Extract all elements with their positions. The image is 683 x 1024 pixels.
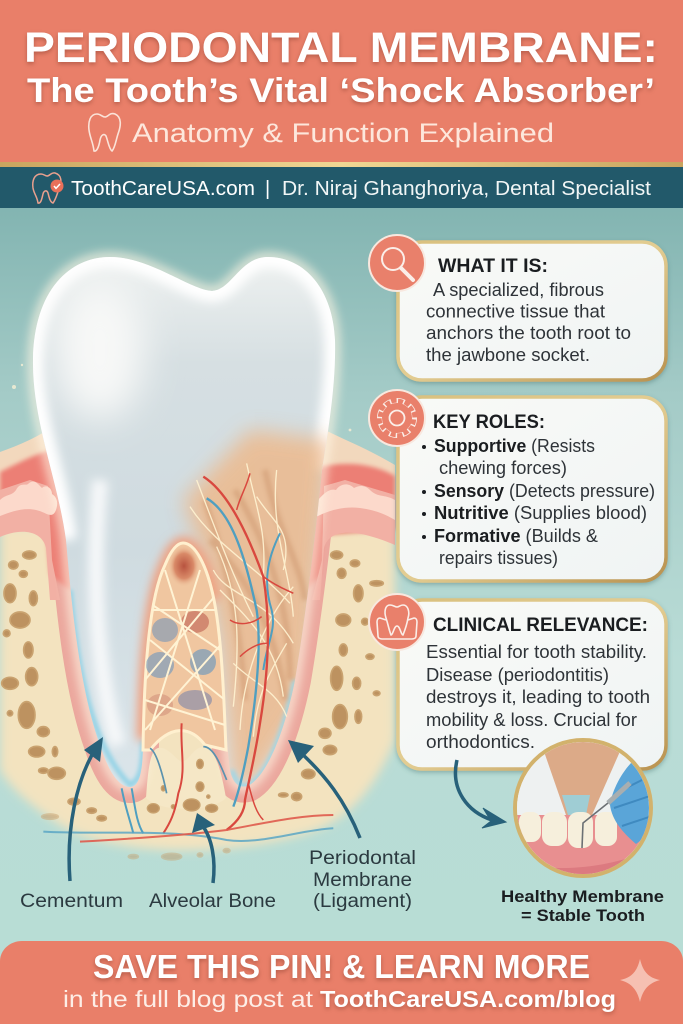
panel: key roles (369, 390, 666, 581)
panel: clinical relevance (369, 594, 666, 769)
description: orthodontics. (426, 732, 535, 752)
roles list (422, 436, 655, 568)
description: destroys it, leading to tooth (426, 687, 650, 707)
icon: magnifier (369, 235, 425, 291)
label: periodontal membrane (309, 848, 416, 912)
site name: ToothCareUSA.com (71, 178, 255, 200)
description: connective tissue that (426, 302, 605, 322)
arrow: cementum (69, 737, 103, 881)
photo: dental probe on healthy gums (515, 740, 655, 876)
bone mass (0, 525, 395, 850)
roles list: Supportive (Resists (434, 436, 595, 456)
description: the jawbone socket. (426, 345, 590, 365)
heading: KEY ROLES: (433, 412, 545, 433)
icon: tooth outline (89, 114, 120, 151)
roles list: Formative (Builds & (434, 526, 598, 546)
description: A specialized, fibrous (433, 280, 604, 300)
left gum pink body (0, 480, 60, 600)
right gum lobes (313, 484, 395, 520)
title line 2: The Tooth’s Vital ‘Shock Absorber’ (27, 72, 655, 110)
caption (501, 887, 664, 925)
arrow: to photo (455, 760, 506, 828)
label: cementum: Cementum (20, 891, 123, 912)
middle bone pores (147, 759, 218, 813)
label: periodontal membrane: (Ligament) (313, 891, 412, 912)
icon: logo tooth (33, 173, 64, 203)
footer link text: in the full blog post at (63, 986, 314, 1012)
footer heading: SAVE THIS PIN! & LEARN MORE (93, 948, 590, 985)
label: periodontal membrane: Membrane (313, 870, 412, 891)
roles list: repairs tissues) (439, 548, 558, 568)
title line 1: PERIODONTAL MEMBRANE: (24, 24, 658, 72)
background (0, 205, 683, 965)
caption: Healthy Membrane (501, 887, 664, 906)
description (426, 280, 631, 365)
gold divider (0, 162, 683, 167)
icon: gear (369, 390, 425, 446)
author name: Dr. Niraj Ghanghoriya, Dental Specialist (282, 178, 651, 200)
arrow: alveolar bone (192, 813, 215, 883)
heading: WHAT IT IS: (438, 256, 548, 277)
right gum cream edge (310, 430, 395, 500)
description: Essential for tooth stability. (426, 642, 647, 662)
heading: CLINICAL RELEVANCE: (433, 615, 648, 636)
periodontal band (66, 470, 322, 787)
middle bone between roots (146, 747, 226, 809)
description: anchors the tooth root to (426, 323, 631, 343)
subtitle: Anatomy & Function Explained (132, 118, 554, 148)
sparkles (12, 364, 351, 431)
icon: sparkle (620, 959, 660, 1002)
right gum red band (304, 464, 395, 590)
tooth body (33, 257, 335, 787)
label: periodontal membrane: Periodontal (309, 848, 416, 869)
arrow: periodontal membrane (288, 740, 360, 838)
separator: | (265, 178, 270, 200)
panel: what it is (369, 235, 666, 380)
tooth anatomy illustration (0, 257, 395, 860)
tooth shading (33, 257, 335, 790)
roles list: Nutritive (Supplies blood) (434, 503, 647, 523)
left gum cream edge (0, 425, 72, 500)
footer link url: ToothCareUSA.com/blog (320, 986, 616, 1012)
description: Disease (periodontitis) (426, 665, 609, 685)
fibres and vessels (43, 463, 333, 842)
author bar (0, 167, 683, 208)
description (426, 642, 650, 752)
root furcation fibres (143, 543, 226, 750)
right gum pink body (312, 480, 395, 600)
roles list: Sensory (Detects pressure) (434, 481, 655, 501)
left gum red band (0, 450, 74, 590)
icon: tooth in gum (369, 594, 425, 650)
bone pores (2, 551, 383, 860)
description: mobility & loss. Crucial for (426, 710, 637, 730)
caption: = Stable Tooth (521, 906, 645, 925)
roles list: chewing forces) (439, 458, 567, 478)
tooth glow (33, 257, 335, 787)
footer band (0, 941, 683, 1024)
left gum lobes (0, 481, 57, 516)
label: alveolar bone: Alveolar Bone (149, 891, 276, 912)
header band (0, 0, 683, 163)
